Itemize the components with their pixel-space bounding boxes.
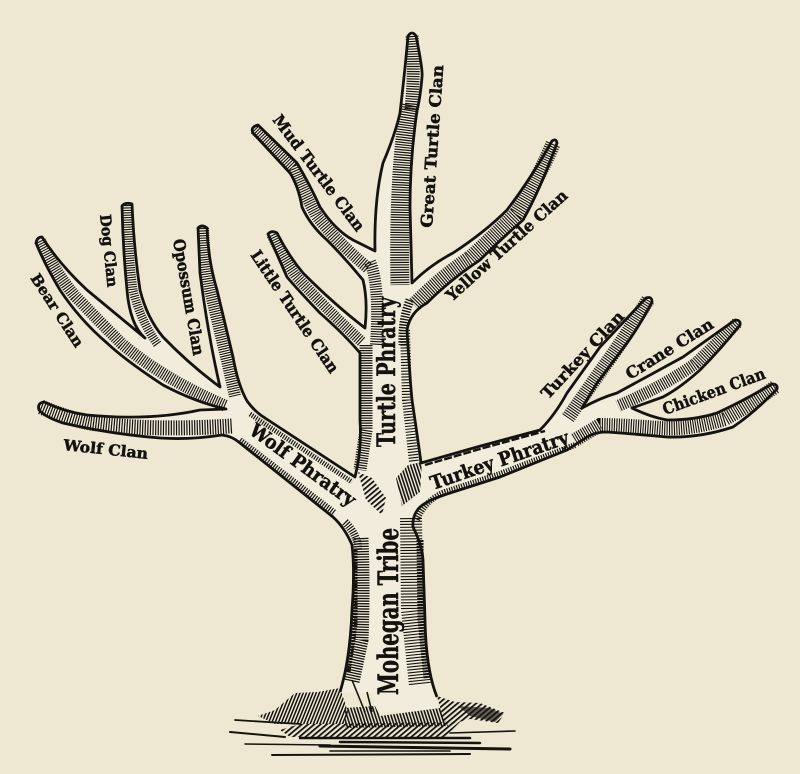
label: Crane Clan: Crane Clan [622, 314, 717, 383]
little turtle branch hatching [272, 235, 362, 342]
label: Chicken Clan: Chicken Clan [660, 364, 768, 419]
base roots light area [372, 690, 440, 712]
bear branch hatching [40, 241, 226, 406]
label: Dog Clan: Dog Clan [96, 214, 122, 288]
label: Bear Clan: Bear Clan [27, 270, 88, 351]
dog branch hatching [127, 205, 158, 345]
ground grass [258, 688, 505, 737]
label: Mohegan Tribe: Mohegan Tribe [372, 528, 405, 695]
label: Great Turtle Clan: Great Turtle Clan [417, 64, 447, 228]
label: Turtle Phratry: Turtle Phratry [372, 296, 401, 447]
label: Little Turtle Clan: Little Turtle Clan [247, 247, 343, 377]
label: Yellow Turtle Clan: Yellow Turtle Clan [441, 186, 572, 306]
chicken clan branch hatching [575, 387, 775, 440]
tree silhouette [36, 33, 777, 697]
turkey phratry hatching [417, 431, 575, 520]
opossum branch hatching [203, 228, 235, 396]
label: Turkey Phratry: Turkey Phratry [427, 426, 573, 495]
label: Wolf Phratry: Wolf Phratry [244, 419, 361, 512]
label: Mud Turtle Clan: Mud Turtle Clan [269, 111, 369, 235]
turtle branch hatching [358, 262, 422, 515]
ground lines [230, 720, 515, 755]
label: Opossum Clan: Opossum Clan [169, 237, 208, 357]
mud turtle branch hatching [255, 129, 368, 268]
yellow turtle branch hatching [414, 144, 553, 305]
wolf phratry hatching [240, 414, 358, 550]
wolf clan branch hatching [41, 407, 232, 428]
crane clan branch hatching [618, 323, 737, 406]
trunk hatching [348, 518, 427, 712]
label: Wolf Clan: Wolf Clan [62, 436, 149, 463]
great turtle branch hatching [400, 36, 413, 285]
turkey clan branch hatching [568, 300, 648, 418]
label: Turkey Clan: Turkey Clan [537, 307, 628, 403]
